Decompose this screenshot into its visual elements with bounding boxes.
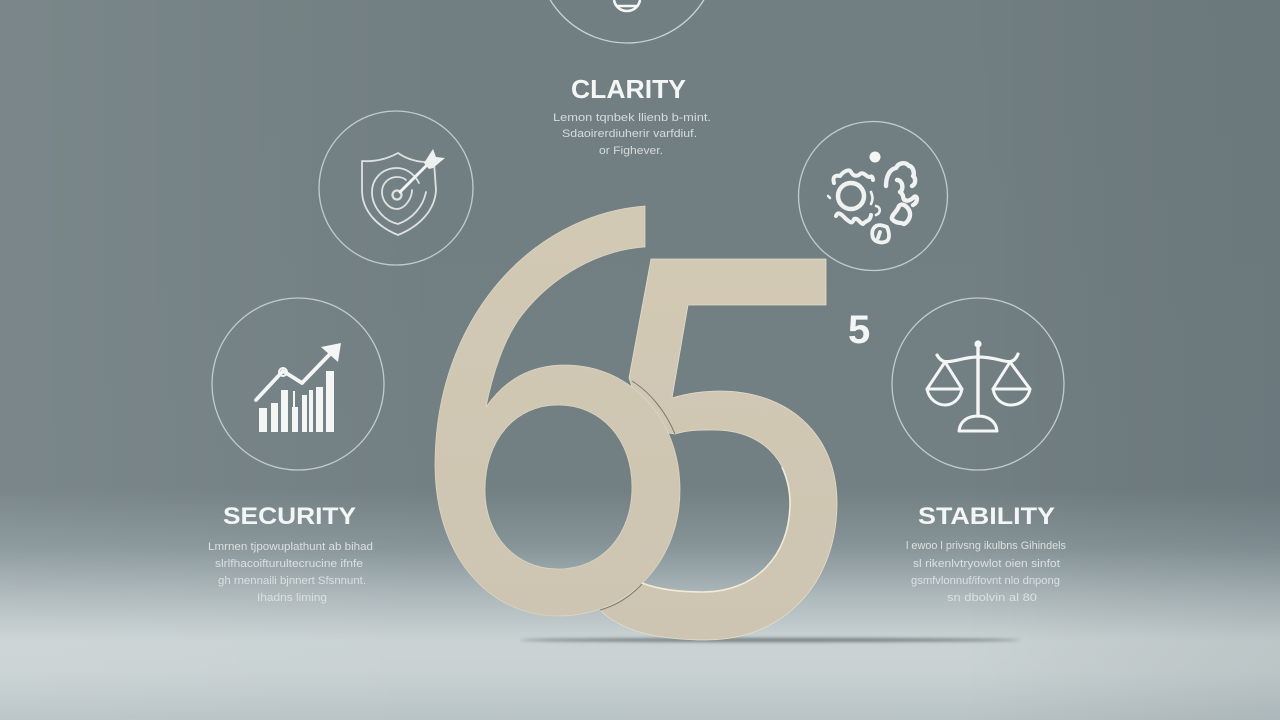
icon: large gear <box>828 170 880 224</box>
icon: small gear <box>872 225 889 242</box>
text block: clarity description: Sdaoirerdiuherir varfdiuf. <box>562 128 697 140</box>
digit 6 <box>435 206 680 616</box>
panel: stability <box>848 298 1066 604</box>
panel: gears icon <box>798 122 948 270</box>
trend arrow <box>256 343 341 400</box>
digit 5 inner highlight <box>642 467 790 592</box>
text block: security description: gh rnennaili bjnnert Sfsnnunt. <box>218 575 366 587</box>
text block: stability description: gsmfvlonnuf/ifovnt nlo dnpong <box>911 575 1060 587</box>
circle outline: stability <box>892 298 1064 470</box>
text block: security description <box>208 541 373 604</box>
icon: top circle, cropped <box>537 0 717 43</box>
text block: security description: Lmrnen tjpowuplathunt ab bihad <box>208 541 373 553</box>
chart bars <box>259 371 334 432</box>
circle outline: security <box>212 298 384 470</box>
number: small 5: 5 <box>848 308 870 352</box>
icon: shield <box>362 153 436 235</box>
text block: stability description: l ewoo l privsng ikulbns Gihindels <box>906 540 1066 552</box>
text block: stability description: sl rikenlvtryowlot oien sinfot <box>913 558 1060 570</box>
text block: security description: Ihadns liming <box>257 592 327 604</box>
floor shadow <box>520 638 1020 642</box>
icon: arrow <box>400 149 445 192</box>
digit 5 <box>600 259 837 640</box>
panel: top clarity <box>537 0 717 157</box>
text block: stability description: sn dbolvin al 80 <box>947 592 1037 604</box>
icon: target rings <box>372 168 426 224</box>
large number 65 <box>435 206 837 640</box>
overlap seam, upper <box>632 381 675 434</box>
icon: growth chart <box>256 343 341 432</box>
heading: stability: STABILITY <box>918 503 1055 530</box>
text block: stability description <box>906 540 1066 604</box>
panel: security <box>208 298 384 604</box>
text block: clarity description: Lemon tqnbek llienb b-mint. <box>553 112 711 124</box>
panel: target icon <box>319 111 473 265</box>
overlap seam, lower <box>600 584 642 610</box>
text block: security description: slrlfhacoifturultecrucine ifnfe <box>215 558 363 570</box>
icon: right gear <box>886 163 917 224</box>
text block: clarity description <box>553 112 711 157</box>
heading: clarity: CLARITY <box>571 74 686 104</box>
circle outline: target <box>319 111 473 265</box>
circle outline: gears <box>798 122 948 270</box>
icon: dot <box>870 152 880 162</box>
heading: security: SECURITY <box>223 503 356 530</box>
icon: balance scale <box>927 340 1030 431</box>
text block: clarity description: or Fighever. <box>599 145 663 157</box>
